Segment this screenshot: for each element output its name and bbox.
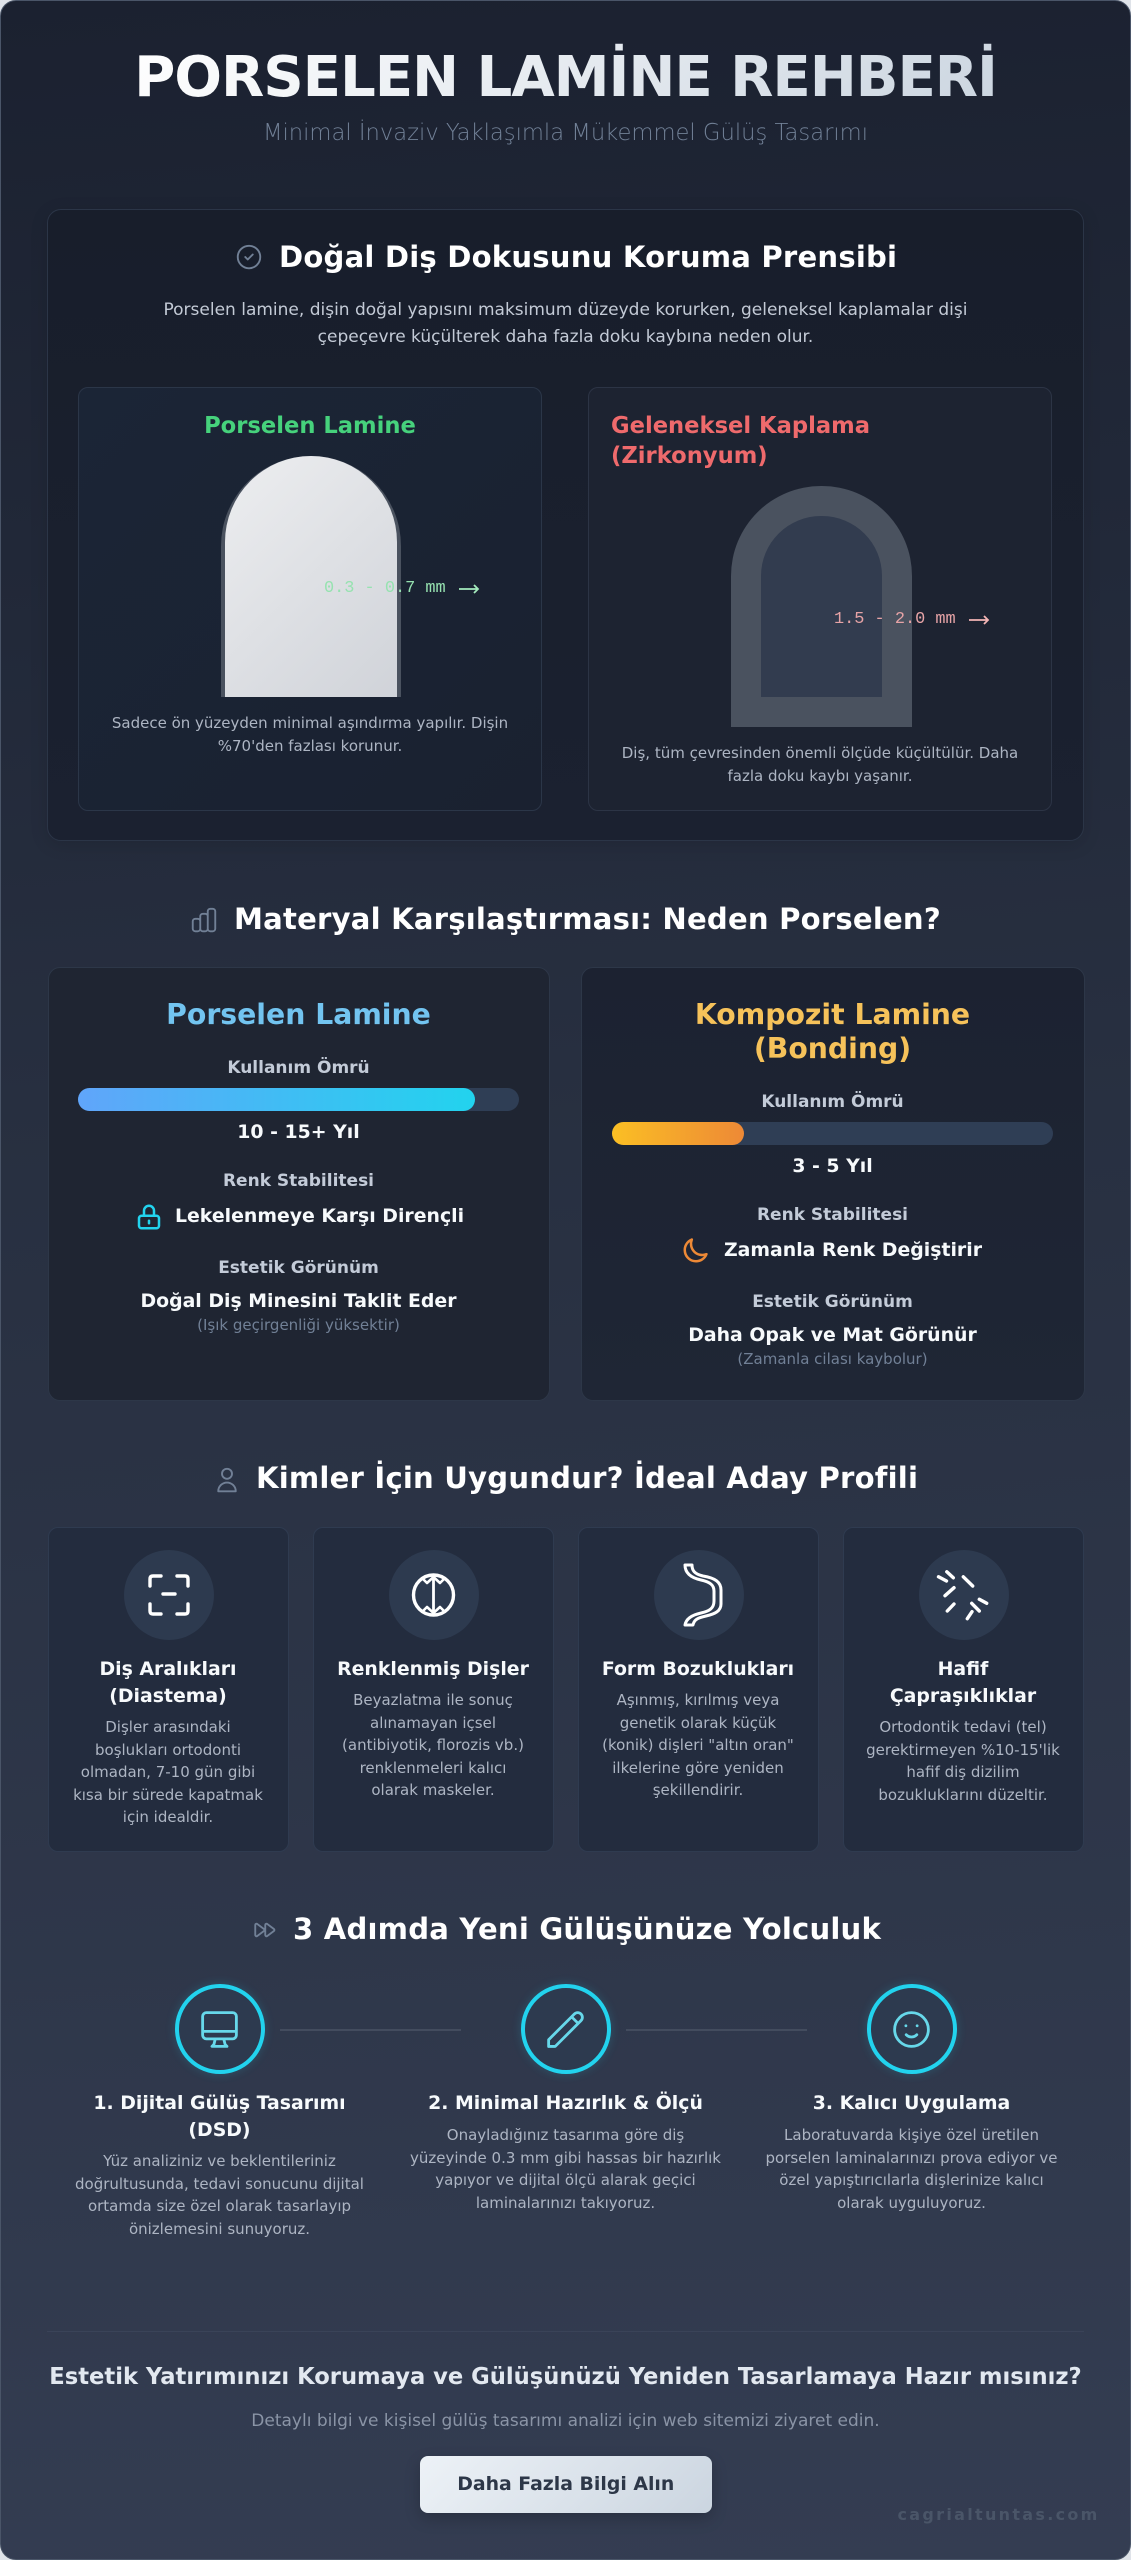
icon: pencil — [547, 2011, 584, 2048]
intro text: çepeçevre küçülterek daha fazla doku kaybına neden olur. — [318, 327, 813, 347]
panel title: composite: (Bonding) — [754, 1032, 911, 1065]
icon: split circle — [412, 1573, 456, 1617]
panel title: porcelain: Porselen Lamine — [166, 998, 431, 1031]
card title: diastema: Diş Aralıkları — [100, 1658, 236, 1680]
step 1 title — [93, 2092, 346, 2141]
card: traditional crown — [588, 387, 1052, 811]
bar fill — [78, 1088, 475, 1111]
remaining tooth core — [761, 516, 882, 697]
card text: diastema: için idealdir. — [123, 1808, 213, 1826]
step 2 circle — [520, 1984, 610, 2074]
watermark: cagrialtuntas.com — [898, 2505, 1100, 2524]
card: mild crowding — [842, 1526, 1084, 1852]
subtitle: Minimal İnvaziv Yaklaşımla Mükemmel Gülüş Tasarımı — [263, 120, 868, 146]
step 3 text: özel yapıştırıcılarla dişlerinize kalıcı — [779, 2171, 1044, 2189]
step 1 text — [75, 2152, 364, 2238]
icon: reshaped tooth contour — [684, 1564, 722, 1626]
card text: mild crowding: bozukluklarını düzeltir. — [878, 1786, 1048, 1804]
icon: moon — [684, 1238, 708, 1262]
card title: mild crowding — [890, 1658, 1036, 1707]
step 1 title: (DSD) — [188, 2119, 251, 2141]
card title: form defects: Form Bozuklukları — [602, 1658, 794, 1680]
icon: user — [217, 1468, 237, 1492]
description: crown: Diş, tüm çevresinden önemli ölçüde küçültülür. Daha — [622, 744, 1018, 762]
card title: diastema: (Diastema) — [109, 1685, 227, 1707]
connector: step 1 to 2 — [280, 2029, 461, 2031]
description: crown: fazla doku kaybı yaşanır. — [728, 766, 912, 784]
value: aesthetics composite: Daha Opak ve Mat Görünür — [688, 1324, 977, 1346]
step 3 text: porselen laminalarınızı prova ediyor ve — [766, 2148, 1057, 2166]
card text: form defects: Aşınmış, kırılmış veya — [617, 1691, 779, 1709]
heading: tooth preservation: Doğal Diş Dokusunu Koruma Prensibi — [279, 240, 897, 274]
panel: tooth preservation principle — [47, 209, 1084, 841]
icon circle: mild crowding — [919, 1550, 1009, 1640]
step 3 text: olarak uyguluyoruz. — [837, 2194, 986, 2212]
card text: mild crowding: Ortodontik tedavi (tel) — [879, 1718, 1047, 1736]
value: porcelain lifetime: 10 - 15+ Yıl — [237, 1121, 360, 1143]
panel title: composite: Kompozit Lamine — [695, 998, 970, 1031]
button — [420, 2456, 712, 2513]
card title: discolored teeth: Renklenmiş Dişler — [337, 1658, 529, 1680]
step 2 text: Onayladığınız tasarıma göre diş — [447, 2126, 684, 2144]
title: PORSELEN LAMİNE REHBERİ — [134, 45, 997, 110]
step 3 circle — [866, 1984, 956, 2074]
connector: step 2 to 3 — [626, 2029, 807, 2031]
button: Daha Fazla Bilgi Alın — [457, 2473, 674, 2495]
card text: diastema: olmadan, 7-10 gün gibi — [81, 1763, 255, 1781]
card text: form defects — [602, 1691, 794, 1799]
card text: form defects: ilkelerine göre yeniden — [612, 1758, 784, 1776]
note: polish loss: (Zamanla cilası kaybolur) — [737, 1350, 928, 1368]
measure label: 0.3 - 0.7 mm: 0.3 - 0.7 mm — [324, 579, 446, 598]
icon: fast forward — [254, 1922, 276, 1938]
progress bar: porcelain lifetime — [78, 1088, 519, 1111]
tooth diagram: porcelain veneer — [221, 456, 401, 697]
heading: three steps: 3 Adımda Yeni Gülüşünüze Yolculuk — [293, 1912, 881, 1946]
tooth diagram: crown — [731, 486, 912, 727]
step 1 text: Yüz analiziniz ve beklentileriniz — [103, 2152, 336, 2170]
step 3 text — [766, 2126, 1057, 2212]
card: porcelain veneer — [78, 387, 542, 811]
card text: diastema: kısa bir sürede kapatmak — [73, 1786, 263, 1804]
card text: form defects: (konik) dişleri "altın oran" — [602, 1736, 794, 1754]
step 1 circle — [174, 1984, 264, 2074]
card text: mild crowding — [866, 1718, 1060, 1804]
icon: bar chart — [192, 908, 216, 932]
panel: composite material — [580, 967, 1084, 1401]
card text: discolored teeth: alınamayan içsel — [370, 1714, 496, 1732]
description: crown — [622, 744, 1018, 784]
card text: discolored teeth: renklenmeleri kalıcı — [360, 1758, 506, 1776]
step 2 text — [410, 2126, 721, 2212]
description: porcelain veneer — [112, 714, 508, 754]
footer call to action heading: Estetik Yatırımınızı Korumaya ve Gülüşünüzü Yeniden Tasarlamaya Hazır mısınız? — [49, 2364, 1082, 2390]
icon: check circle — [236, 244, 262, 270]
card title: traditional crown: (Zirkonyum) — [611, 443, 768, 469]
card text: diastema — [73, 1718, 263, 1826]
label: color stability: Renk Stabilitesi — [223, 1171, 374, 1191]
card text: discolored teeth: olarak maskeler. — [371, 1781, 495, 1799]
step 1 text: önizlemesini sunuyoruz. — [129, 2220, 310, 2238]
label: color stability: Renk Stabilitesi — [757, 1205, 908, 1225]
card title: diastema — [100, 1658, 236, 1707]
measure label: 1.5 - 2.0 mm: 1.5 - 2.0 mm — [834, 610, 956, 629]
intro text: Porselen lamine, dişin doğal yapısını maksimum düzeyde korurken, geleneksel kaplamalar dişi — [164, 300, 967, 320]
icon: computer — [201, 2011, 238, 2048]
step 3 text: Laboratuvarda kişiye özel üretilen — [784, 2126, 1039, 2144]
heading: material comparison: Materyal Karşılaştırması: Neden Porselen? — [234, 902, 941, 936]
card text: discolored teeth: (antibiyotik, florozis vb.) — [342, 1736, 524, 1754]
icon: viewfinder — [148, 1574, 190, 1616]
footer text: Detaylı bilgi ve kişisel gülüş tasarımı analizi için web sitemizi ziyaret edin. — [251, 2411, 880, 2431]
progress bar: composite lifetime — [612, 1122, 1053, 1145]
step 1 title: 1. Dijital Gülüş Tasarımı — [93, 2092, 346, 2114]
card text: discolored teeth — [342, 1691, 524, 1799]
value: composite lifetime: 3 - 5 Yıl — [792, 1155, 873, 1177]
step 1 text: doğrultusunda, tedavi sonucunu dijital — [75, 2174, 364, 2192]
panel: porcelain material — [48, 967, 550, 1401]
card text: discolored teeth: Beyazlatma ile sonuç — [353, 1691, 513, 1709]
card title: porcelain veneer: Porselen Lamine — [204, 413, 416, 439]
panel title: composite — [695, 998, 970, 1065]
icon circle: discolored teeth — [389, 1550, 479, 1640]
card: form defects — [578, 1526, 818, 1852]
step 2 title: 2. Minimal Hazırlık & Ölçü — [428, 2092, 703, 2114]
card text: diastema: Dişler arasındaki — [105, 1718, 231, 1736]
icon: lock — [138, 1204, 160, 1230]
card text: form defects: şekillendirir. — [653, 1781, 743, 1799]
intro text — [164, 300, 967, 347]
bar fill — [612, 1122, 744, 1145]
label: lifetime: Kullanım Ömrü — [227, 1058, 370, 1078]
description: porcelain veneer: %70'den fazlası korunur. — [218, 736, 402, 754]
label: aesthetics: Estetik Görünüm — [218, 1258, 379, 1278]
value: color change: Zamanla Renk Değiştirir — [724, 1239, 982, 1261]
card text: diastema: boşlukları ortodonti — [95, 1740, 241, 1758]
value: stain resistant: Lekelenmeye Karşı Dirençli — [175, 1205, 464, 1227]
card title: traditional crown: Geleneksel Kaplama — [611, 413, 870, 439]
veneer layer — [225, 456, 397, 697]
card: diastema — [48, 1526, 288, 1852]
value: aesthetics porcelain: Doğal Diş Minesini Taklit Eder — [140, 1290, 457, 1312]
card text: form defects: genetik olarak küçük — [620, 1714, 776, 1732]
card text: mild crowding: hafif diş dizilim — [906, 1763, 1020, 1781]
note: translucency: (Işık geçirgenliği yüksektir) — [197, 1316, 400, 1334]
card: discolored teeth — [312, 1526, 554, 1852]
heading: ideal candidate: Kimler İçin Uygundur? İdeal Aday Profili — [256, 1461, 918, 1495]
icon circle: form defects — [654, 1550, 744, 1640]
label: aesthetics: Estetik Görünüm — [752, 1292, 913, 1312]
card title: mild crowding: Hafif — [938, 1658, 988, 1680]
label: lifetime: Kullanım Ömrü — [761, 1092, 904, 1112]
step 3 title: 3. Kalıcı Uygulama — [813, 2092, 1010, 2114]
card text: mild crowding: gerektirmeyen %10-15'lik — [866, 1740, 1060, 1758]
icon: scattered dashes — [936, 1570, 988, 1620]
card title: mild crowding: Çapraşıklıklar — [890, 1685, 1036, 1707]
description: porcelain veneer: Sadece ön yüzeyden minimal aşındırma yapılır. Dişin — [112, 714, 508, 732]
icon circle: diastema — [124, 1550, 214, 1640]
step 2 text: yapıyor ve dijital ölçü alarak geçici — [435, 2171, 696, 2189]
card title: traditional crown — [611, 413, 870, 469]
step 2 text: yüzeyinde 0.3 mm gibi hassas bir hazırlık — [410, 2148, 721, 2166]
step 2 text: laminalarınızı takıyoruz. — [476, 2194, 655, 2212]
icon: smile — [893, 2011, 930, 2048]
step 1 text: ortamda size özel olarak tasarlayıp — [88, 2197, 351, 2215]
